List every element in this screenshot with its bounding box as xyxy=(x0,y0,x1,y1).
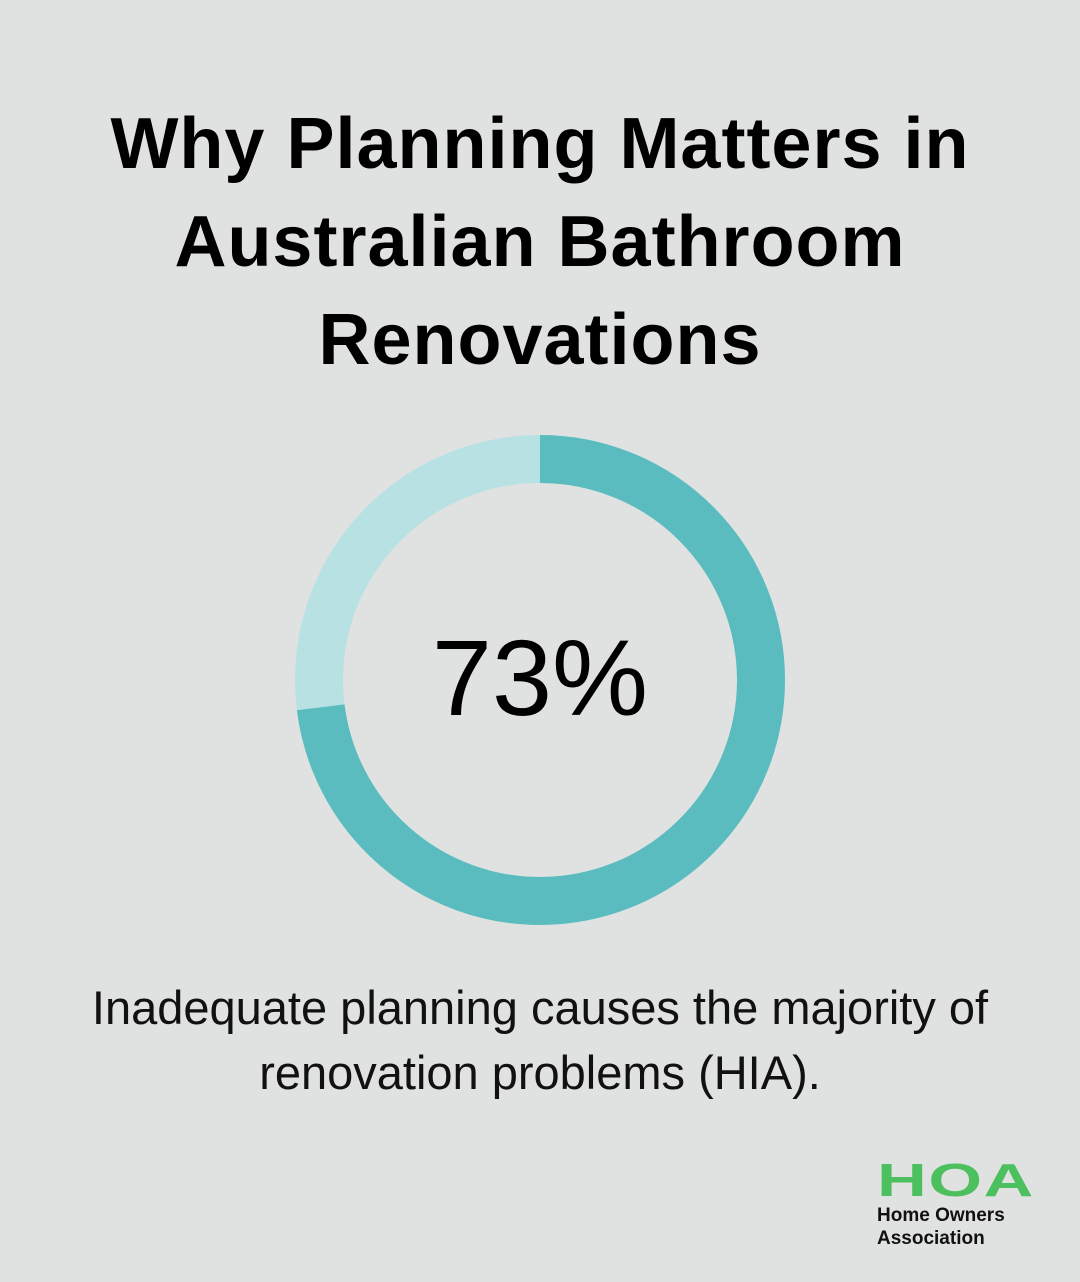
logo: Association xyxy=(877,1228,985,1249)
caption xyxy=(92,981,988,1099)
title: Why Planning Matters in xyxy=(110,104,970,184)
logo: HOA xyxy=(877,1154,1035,1206)
logo xyxy=(877,1154,1035,1249)
title xyxy=(110,104,970,380)
title: Australian Bathroom xyxy=(174,202,906,282)
caption: renovation problems (HIA). xyxy=(259,1046,821,1099)
title: Renovations xyxy=(318,300,762,380)
caption: Inadequate planning causes the majority of xyxy=(92,981,988,1034)
donut chart: 73% xyxy=(432,617,648,738)
logo: Home Owners xyxy=(877,1205,1005,1226)
